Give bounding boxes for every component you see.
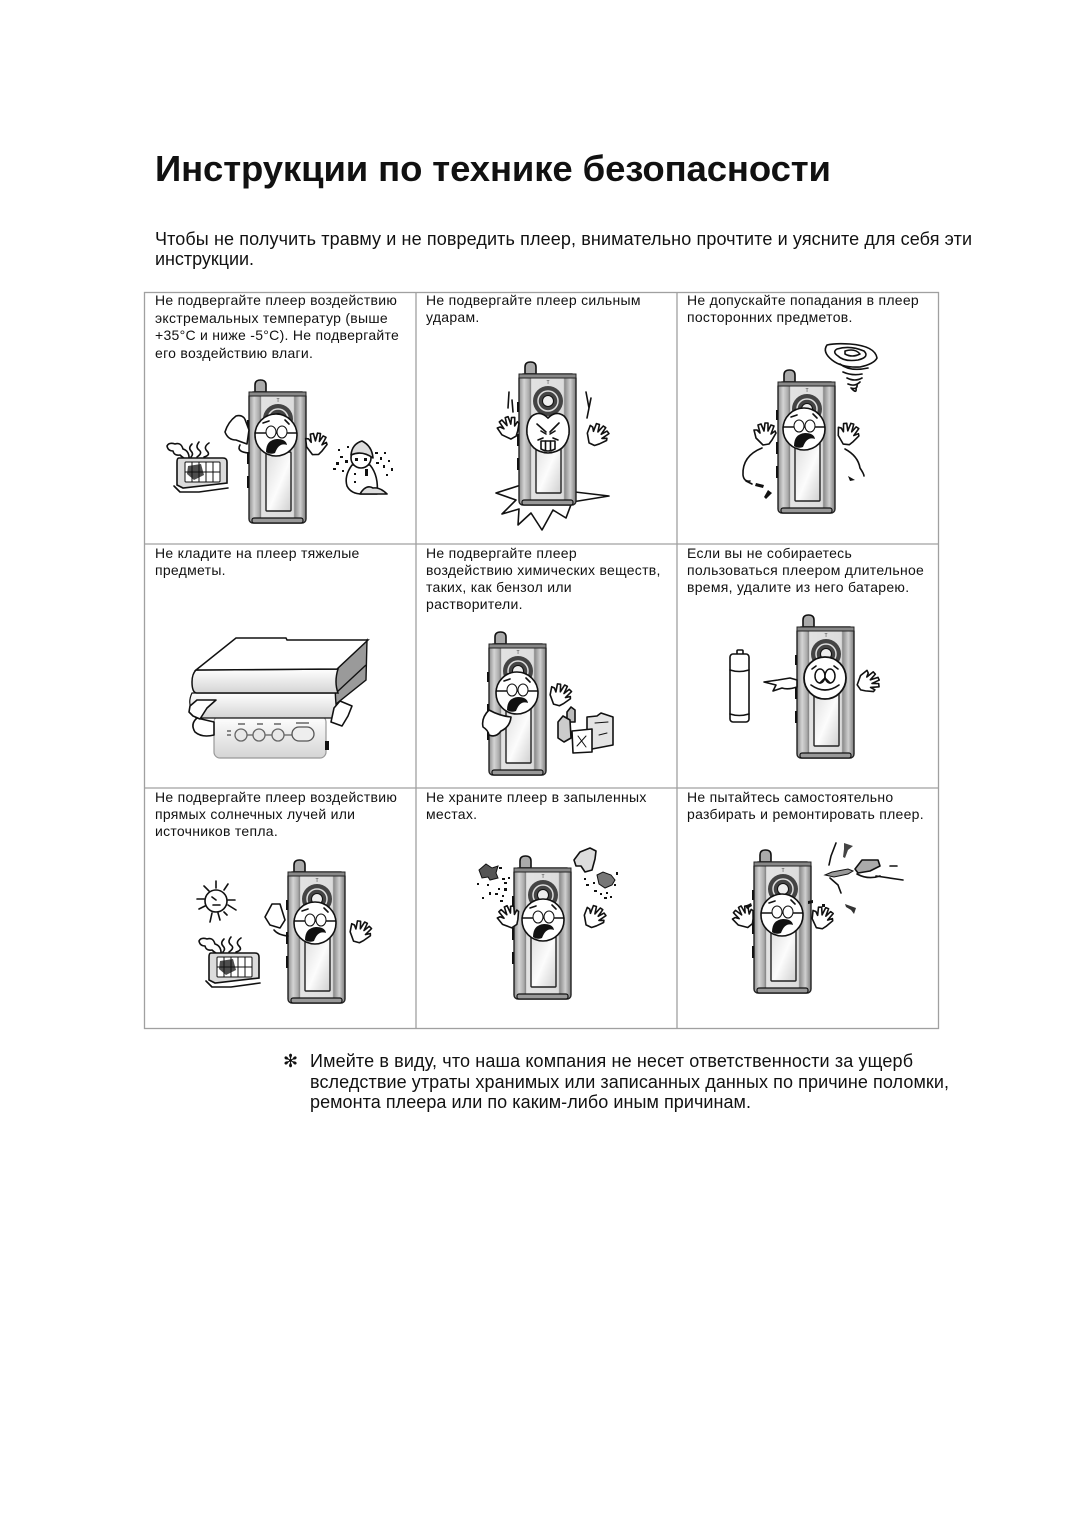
disclaimer note: Имейте в виду, что наша компания не несет ответственности за ущерб — [310, 1051, 913, 1071]
icon: player under stacked books — [189, 638, 368, 758]
icon: snowman — [333, 441, 393, 494]
icon: swirl — [825, 344, 877, 391]
icon: player mascot pointing — [764, 615, 883, 758]
caption: heavy objects — [155, 545, 360, 578]
caption: remove battery: время, удалите из него батарею. — [687, 579, 909, 595]
disclaimer note: вследствие утраты хранимых или записанных данных по причине поломки, — [310, 1072, 949, 1092]
panel: no disassembly — [687, 789, 924, 993]
icon: impact burst — [496, 484, 609, 530]
caption: dusty places: местах. — [426, 806, 477, 822]
table grid — [144, 292, 939, 1028]
panel: impacts — [426, 292, 641, 530]
caption: extreme temperatures: Не подвергайте плеер воздействию — [155, 292, 397, 308]
caption: direct sunlight: источников тепла. — [155, 823, 278, 839]
caption: chemicals — [426, 545, 661, 612]
icon: chemical containers — [558, 707, 613, 753]
caption: direct sunlight — [155, 789, 397, 839]
caption: heavy objects: предметы. — [155, 562, 226, 578]
caption: no disassembly: Не пытайтесь самостоятельно — [687, 789, 893, 805]
safety table — [144, 292, 939, 1028]
caption: chemicals: таких, как бензол или — [426, 579, 572, 595]
panel: foreign objects — [687, 292, 919, 513]
icon: battery — [730, 650, 749, 722]
icon: player mascot — [494, 856, 609, 999]
intro paragraph: инструкции. — [155, 249, 254, 269]
icon: heater — [199, 937, 260, 987]
panel: remove battery — [687, 545, 924, 758]
icon: player mascot with hands — [225, 380, 328, 523]
caption: impacts: Не подвергайте плеер сильным — [426, 292, 641, 308]
caption: extreme temperatures: экстремальных температур (выше — [155, 310, 388, 326]
caption: foreign objects — [687, 292, 919, 325]
panel: heavy objects — [155, 545, 368, 758]
caption: foreign objects: посторонних предметов. — [687, 309, 853, 325]
icon: dust clouds — [477, 848, 618, 902]
caption: foreign objects: Не допускайте попадания в плеер — [687, 292, 919, 308]
player device — [214, 716, 329, 758]
caption: extreme temperatures — [155, 292, 399, 361]
icon: player mascot — [729, 850, 836, 993]
intro paragraph: Чтобы не получить травму и не повредить плеер, внимательно прочтите и уясните для себя эти — [155, 229, 972, 249]
icon: player mascot — [483, 632, 575, 775]
panel: chemicals — [426, 545, 661, 775]
intro paragraph — [155, 229, 972, 269]
caption: no disassembly — [687, 789, 924, 822]
caption: extreme temperatures: +35°C и ниже -5°C). Не подвергайте — [155, 327, 399, 343]
disclaimer note — [283, 1051, 949, 1112]
caption: direct sunlight: прямых солнечных лучей или — [155, 806, 355, 822]
icon: player mascot — [265, 860, 375, 1003]
icon: note mark: ✻ — [283, 1051, 298, 1071]
caption: remove battery — [687, 545, 924, 595]
caption: chemicals: Не подвергайте плеер — [426, 545, 577, 561]
stack of books — [190, 638, 368, 718]
caption: chemicals: воздействию химических веществ, — [426, 562, 661, 578]
panel: direct sunlight — [155, 789, 397, 1003]
hands holding books — [189, 700, 352, 736]
caption: impacts: ударам. — [426, 309, 480, 325]
caption: dusty places: Не храните плеер в запыленных — [426, 789, 647, 805]
icon: heater — [167, 442, 228, 492]
title: Инструкции по технике безопасности — [155, 148, 831, 189]
caption: direct sunlight: Не подвергайте плеер воздействию — [155, 789, 397, 805]
caption: remove battery: Если вы не собираетесь — [687, 545, 852, 561]
caption: heavy objects: Не кладите на плеер тяжелые — [155, 545, 360, 561]
disclaimer note: ремонта плеера или по каким-либо иным причинам. — [310, 1092, 751, 1112]
icon: sun — [197, 881, 236, 922]
caption: impacts — [426, 292, 641, 325]
icon: screwdriver and screws — [825, 843, 903, 914]
icon: player mascot shaking — [495, 362, 612, 505]
caption: no disassembly: разбирать и ремонтировать плеер. — [687, 806, 924, 822]
caption: extreme temperatures: его воздействию влаги. — [155, 345, 313, 361]
icon: player mascot with arrows — [743, 370, 864, 513]
panel: dusty places — [426, 789, 647, 999]
caption: chemicals: растворители. — [426, 596, 523, 612]
caption: dusty places — [426, 789, 647, 822]
caption: remove battery: пользоваться плеером длительное — [687, 562, 924, 578]
panel: extreme temperatures — [155, 292, 399, 523]
